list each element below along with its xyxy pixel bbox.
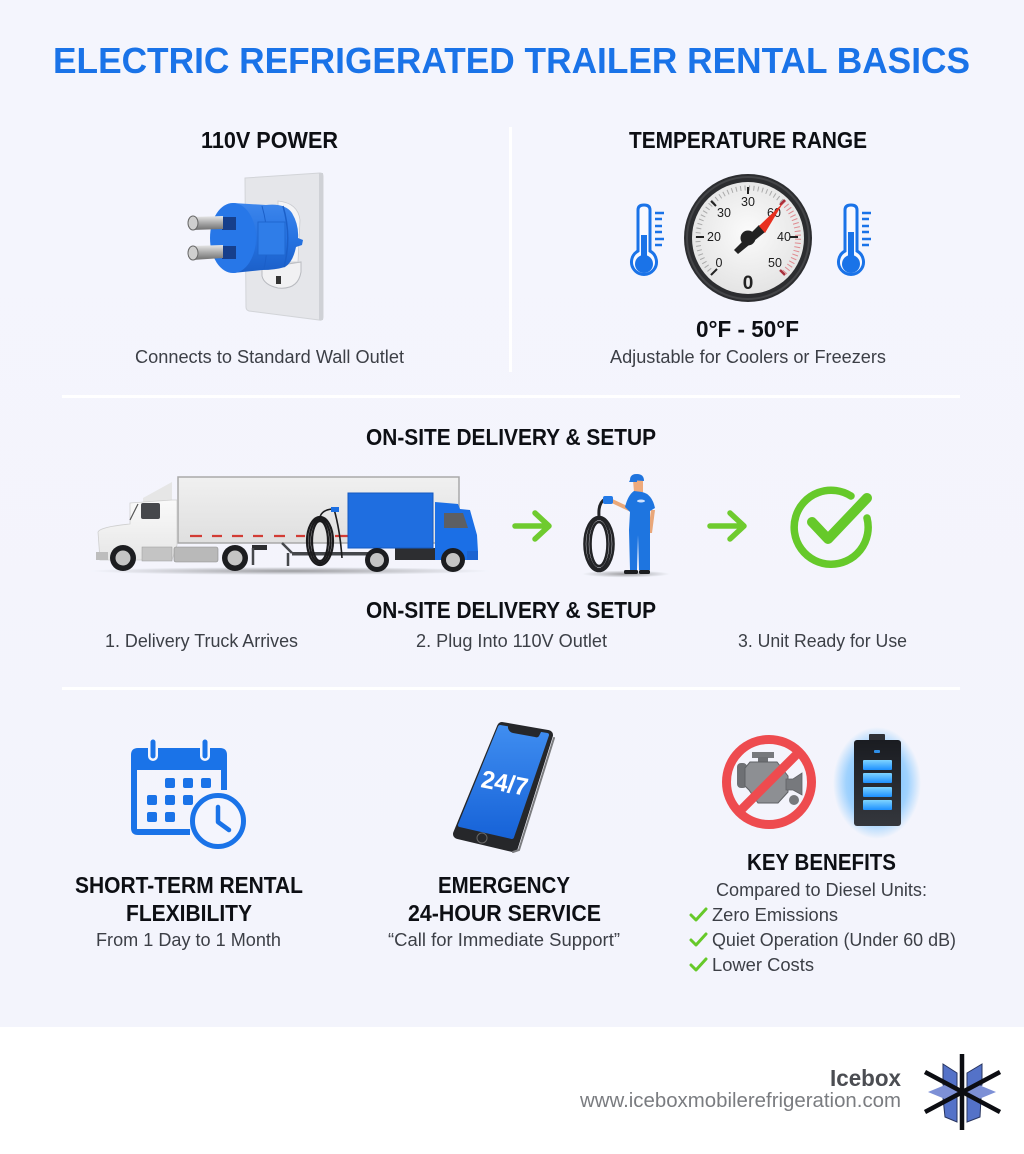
icon: smartphone 24/7: [458, 724, 554, 852]
footer: [0, 1027, 1024, 1154]
heading: key benefits: KEY BENEFITS: [747, 849, 896, 875]
panel: emergency service: [388, 724, 620, 950]
step 3 label: 3. Unit Ready for Use: [738, 631, 907, 651]
heading: delivery: ON-SITE DELIVERY & SETUP: [366, 424, 656, 450]
benefit: quiet operation: Quiet Operation (Under 60 dB): [712, 930, 956, 950]
brand name: Icebox: [830, 1065, 901, 1091]
arrow: step 1 to 2: [515, 513, 549, 539]
icon: calendar and clock: [131, 742, 244, 846]
icon: temperature gauge: 0: [743, 273, 753, 294]
range value: 0°F - 50°F: [696, 316, 799, 342]
icon: smartphone 24/7: 24/7: [479, 765, 530, 802]
step 1 label: 1. Delivery Truck Arrives: [105, 631, 298, 651]
icon: no diesel engine: [726, 740, 812, 824]
heading: short-term rental: SHORT-TERM RENTAL: [75, 872, 303, 898]
icon: temperature gauge: 50: [768, 256, 782, 270]
caption: immediate support: “Call for Immediate Support”: [388, 930, 620, 950]
website url: www.iceboxmobilerefrigeration.com: [579, 1089, 901, 1112]
icon: temperature gauge: 0: [716, 256, 723, 270]
panel: temperature range: [610, 127, 886, 367]
step 2 label: 2. Plug Into 110V Outlet: [416, 631, 607, 651]
icon: temperature gauge: 60: [767, 206, 781, 220]
heading: 110V power: 110V POWER: [201, 127, 338, 153]
caption: wall outlet: Connects to Standard Wall Outlet: [135, 347, 404, 367]
icon: left thermometer: [632, 205, 664, 274]
title: ELECTRIC REFRIGERATED TRAILER RENTAL BASICS: [53, 40, 970, 81]
panel: 110V power: [135, 127, 404, 367]
heading: 24-hour service: 24-HOUR SERVICE: [408, 900, 601, 926]
benefit: zero emissions: Zero Emissions: [712, 905, 838, 925]
caption: adjustable: Adjustable for Coolers or Freezers: [610, 347, 886, 367]
icon: temperature gauge: 20: [707, 230, 721, 244]
heading: temperature range: TEMPERATURE RANGE: [629, 127, 867, 153]
icon: Icebox snowflake logo: [925, 1054, 1000, 1130]
icon: temperature gauge: [684, 174, 812, 302]
panel: on-site delivery and setup: [90, 424, 907, 651]
heading: emergency: EMERGENCY: [438, 872, 570, 898]
icon: plug in wall outlet: [188, 173, 323, 320]
heading: flexibility: FLEXIBILITY: [126, 900, 252, 926]
icon: right thermometer: [838, 205, 871, 274]
icon: temperature gauge: 30: [717, 206, 731, 220]
arrow: step 2 to 3: [710, 513, 744, 539]
caption: rental period: From 1 Day to 1 Month: [96, 930, 281, 950]
icon: temperature gauge: 30: [741, 195, 755, 209]
benefit: lower costs: Lower Costs: [712, 955, 814, 975]
panel: key benefits: [691, 727, 956, 975]
icon: green check: [794, 490, 868, 564]
heading: delivery steps: ON-SITE DELIVERY & SETUP: [366, 597, 656, 623]
illustration: delivery trucks: [90, 477, 490, 575]
illustration: worker with power cable: [582, 474, 670, 578]
caption: compared to diesel: Compared to Diesel Units:: [716, 880, 927, 900]
panel: short-term rental: [75, 742, 303, 950]
icon: glowing battery: [833, 727, 921, 839]
icon: temperature gauge: 40: [777, 230, 791, 244]
